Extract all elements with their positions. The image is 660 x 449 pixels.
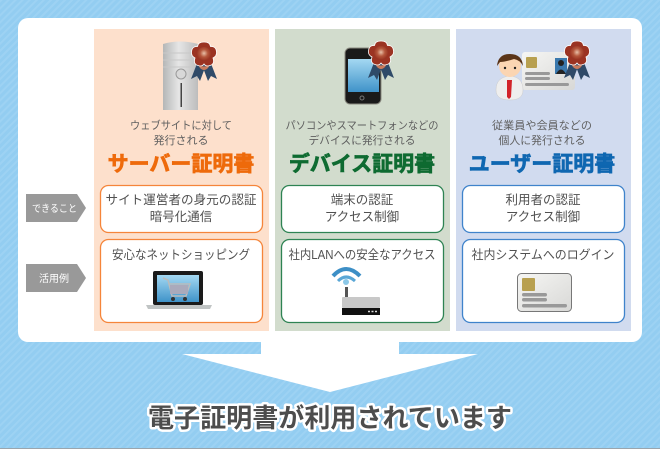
icon: server with rosette (163, 42, 217, 110)
box: capabilities (282, 186, 444, 232)
row label: 活用例: 活用例 (39, 272, 69, 285)
box: use case: 社内LANへの安全なアクセス (288, 247, 436, 262)
description (492, 119, 592, 147)
bottom message: 電子証明書が利用されています (148, 403, 512, 433)
box: use case (282, 240, 444, 322)
row label: できること: できること (32, 203, 77, 215)
row label: できること (26, 194, 86, 222)
description: 発行される (154, 133, 208, 147)
description (130, 118, 232, 147)
box: capabilities: アクセス制御 (506, 209, 580, 224)
description: 個人に発行される (498, 133, 586, 147)
box: use case: 社内システムへのログイン (472, 247, 614, 262)
icon: IC card (518, 274, 572, 312)
box: use case (100, 240, 262, 322)
box: capabilities: アクセス制御 (325, 209, 399, 224)
description: パソコンやスマートフォンなどの (286, 119, 438, 132)
description: 従業員や会員などの (492, 119, 592, 132)
box: capabilities: 利用者の認証 (505, 193, 581, 207)
icon: smartphone with rosette (345, 41, 394, 104)
row label: 活用例 (26, 264, 86, 292)
heading: サーバー証明書 (108, 153, 254, 176)
description (286, 119, 438, 147)
icon: wifi router (333, 269, 380, 315)
main white panel (18, 18, 642, 342)
icon: person with ID card and rosette (496, 41, 590, 100)
box: capabilities (462, 186, 624, 232)
icon: laptop with cart (146, 271, 212, 309)
description: ウェブサイトに対して (130, 118, 232, 132)
heading: デバイス証明書 (289, 152, 435, 176)
panel: user certificate (456, 29, 631, 331)
box: capabilities (100, 186, 262, 232)
box: use case (462, 240, 624, 322)
box: capabilities: 暗号化通信 (150, 209, 213, 224)
heading: ユーザー証明書 (469, 153, 615, 176)
description: デバイスに発行される (308, 133, 416, 147)
box: use case: 安心なネットショッピング (112, 248, 250, 262)
box: capabilities: サイト運営者の身元の認証 (106, 192, 257, 207)
box: capabilities: 端末の認証 (331, 193, 394, 207)
down arrow (182, 340, 478, 392)
panel: device certificate (275, 29, 450, 331)
panel: server certificate (94, 29, 269, 331)
